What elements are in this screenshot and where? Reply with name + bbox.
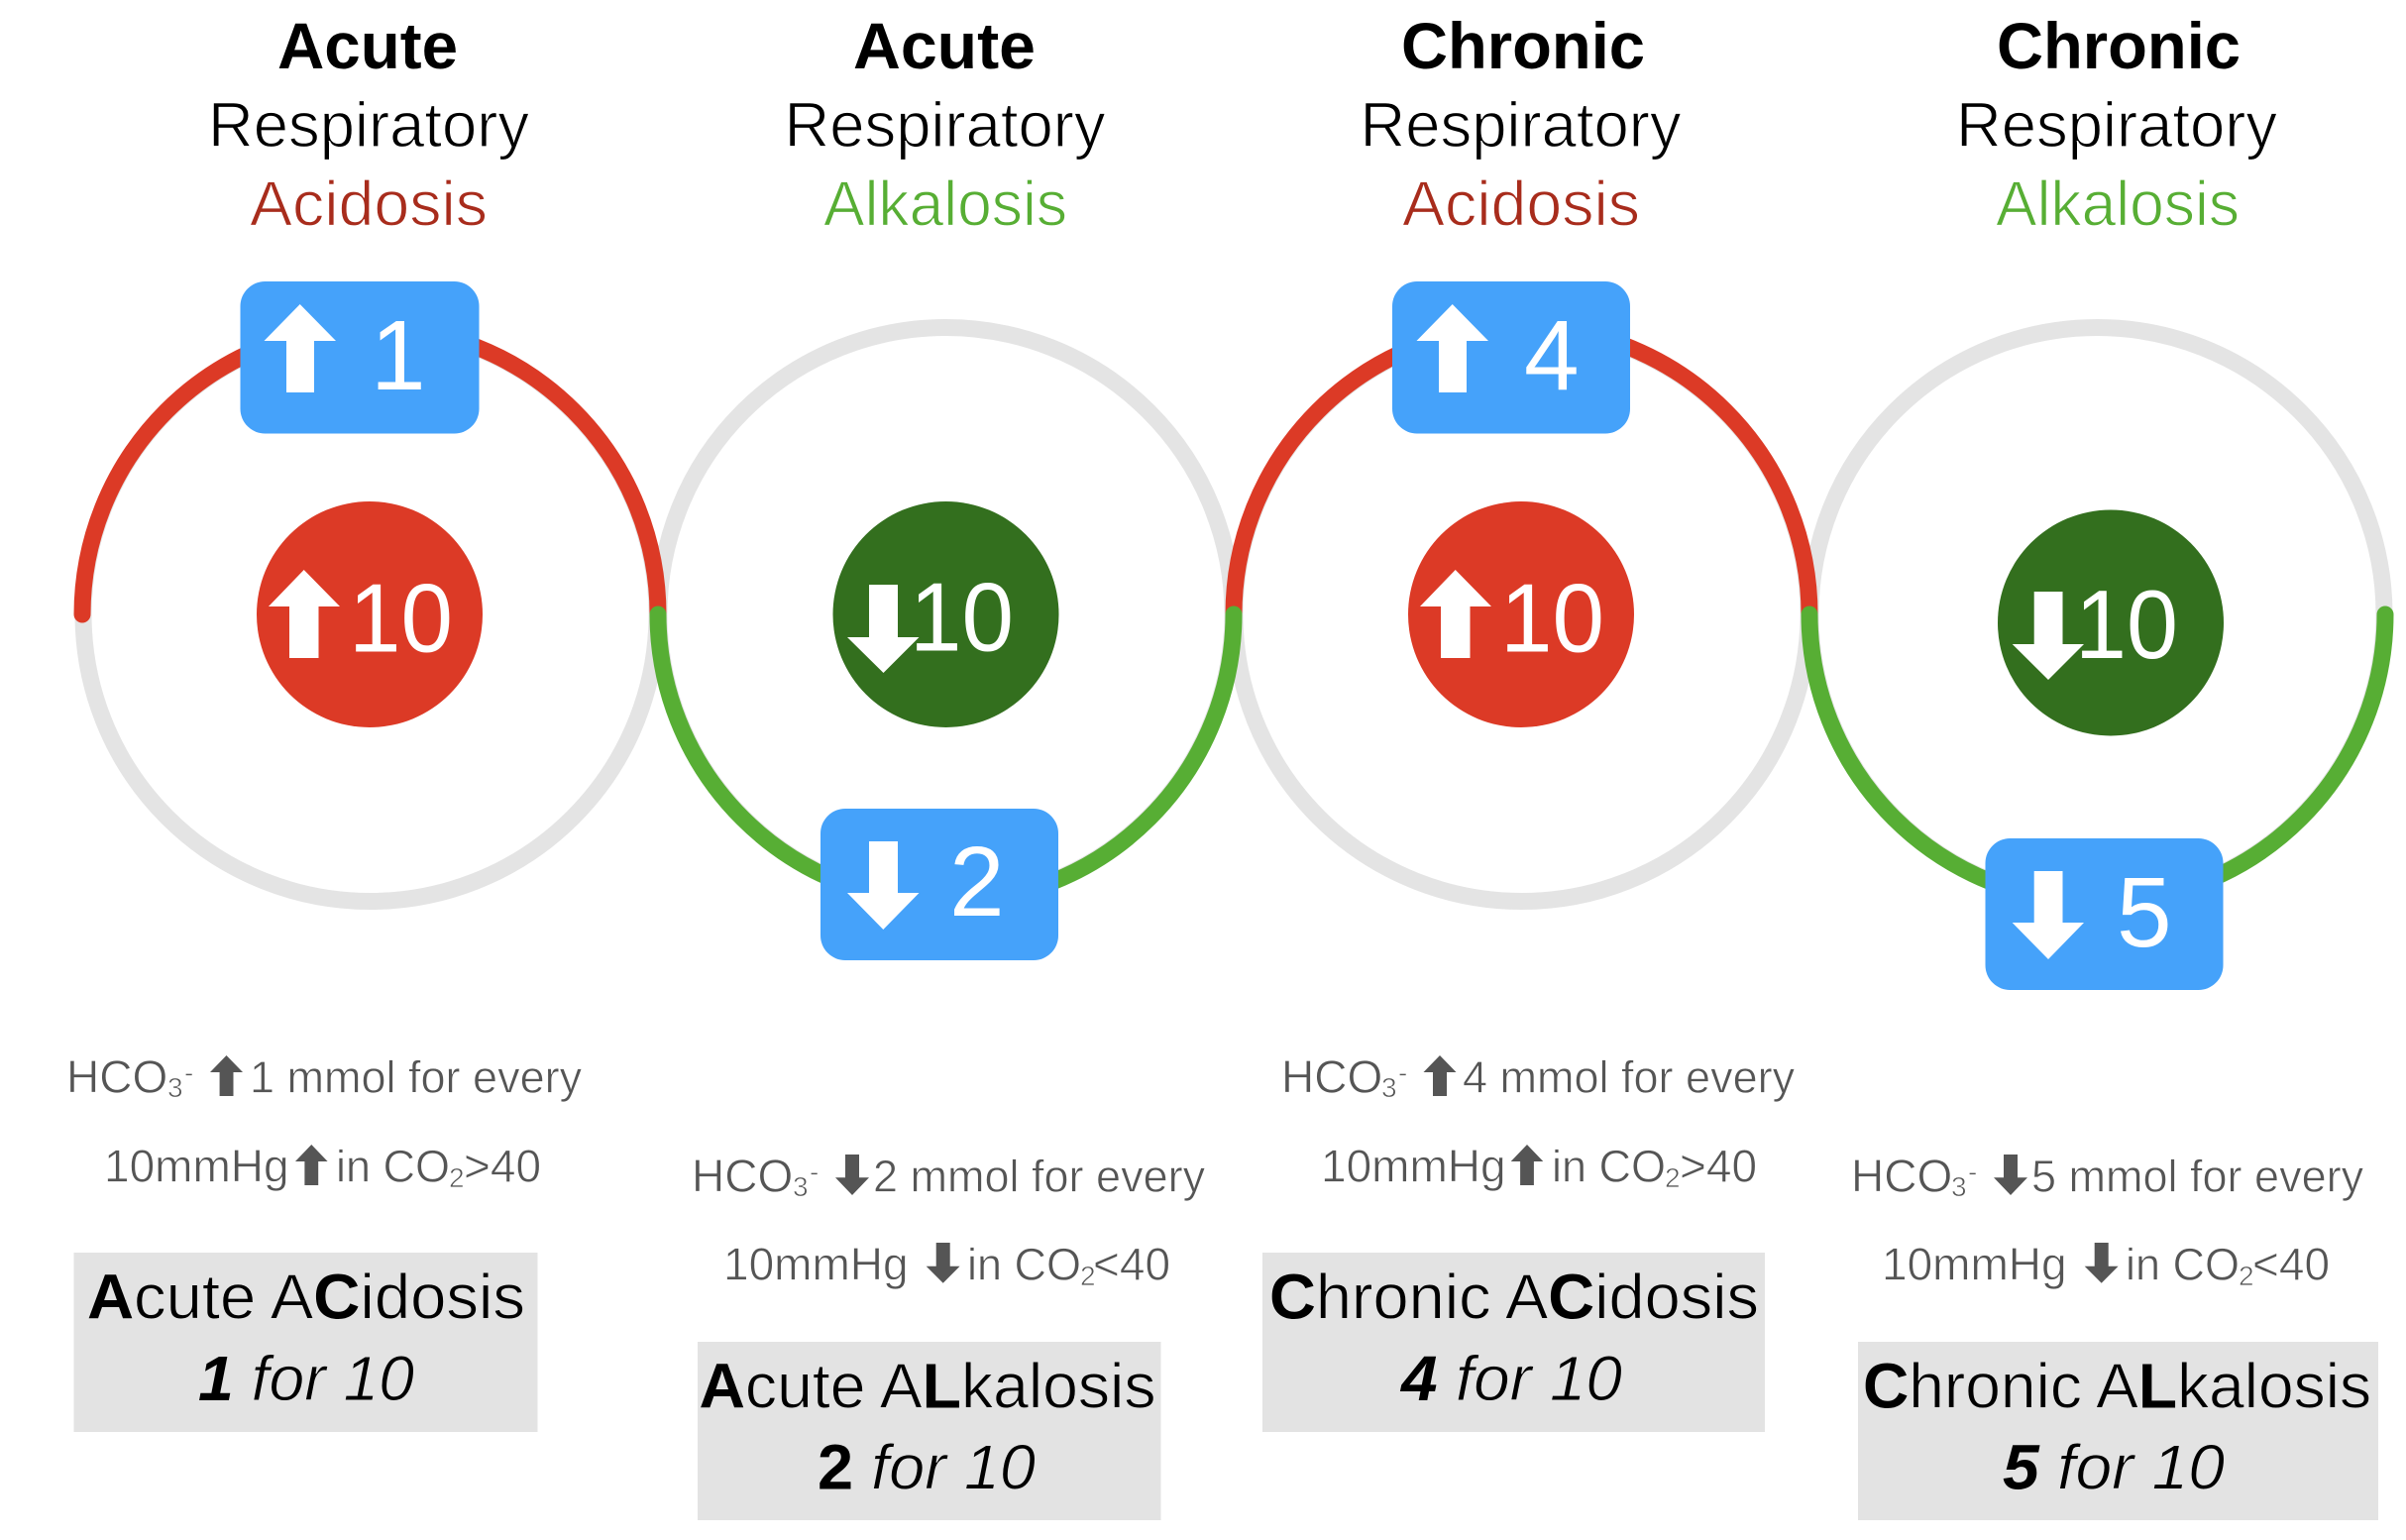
- badge: up 4: 4: [1524, 300, 1580, 411]
- rule text: HCO3 1 mmol: 3: [167, 1072, 183, 1103]
- green alkalosis arcs: [658, 614, 2385, 902]
- rule text: HCO3 5 mmol: HCO: [1851, 1150, 1952, 1201]
- rule text: HCO3 1 mmol: 1 mmol for every: [250, 1052, 583, 1102]
- circle: down 10: [1998, 509, 2224, 735]
- mnemonic box: chronic acidosis 4 for 10: [1262, 1253, 1765, 1432]
- rule text: HCO3 1 mmol: [66, 1050, 583, 1193]
- mnemonic box: acute alkalosis 2 for 10: 2 for 10: [818, 1431, 1036, 1502]
- rule text: HCO3 5 mmol: [1851, 1150, 2364, 1291]
- heading: acute respiratory alkalosis: Alkalosis: [823, 168, 1067, 240]
- circle: up 10: 10: [1500, 563, 1604, 672]
- circle: up 10: 10: [349, 563, 453, 672]
- rule text: HCO3 2 mmol: <40: [1093, 1239, 1170, 1290]
- rule text: HCO3 4 mmol: in CO: [1552, 1142, 1666, 1191]
- rule text: HCO3 5 mmol: 10mmHg: [1882, 1239, 2067, 1290]
- rule text: HCO3 1 mmol: 2: [449, 1162, 465, 1193]
- rule text: HCO3 2 mmol: [692, 1150, 1206, 1291]
- mnemonic box: acute alkalosis 2 for 10: Acute ALkalosis: [700, 1350, 1155, 1421]
- badge: down 5: 5: [2117, 857, 2172, 968]
- rule text: HCO3 5 mmol: 3: [1951, 1171, 1967, 1202]
- rule text: HCO3 4 mmol: >40: [1680, 1140, 1757, 1191]
- heading: acute respiratory alkalosis: Acute: [853, 9, 1036, 82]
- rule text: HCO3 1 mmol: HCO: [66, 1050, 167, 1102]
- badge: down 2: 2: [949, 826, 1005, 937]
- heading: acute respiratory alkalosis: [785, 9, 1106, 240]
- grey base rings: [83, 327, 2384, 902]
- rule text: HCO3 5 mmol: in CO: [2126, 1239, 2240, 1290]
- rule text: HCO3 2 mmol: 3: [793, 1171, 809, 1202]
- heading: acute respiratory acidosis: Acidosis: [250, 168, 488, 240]
- rule text: HCO3 2 mmol: 10mmHg: [723, 1239, 909, 1290]
- rule text: HCO3 4 mmol: HCO: [1281, 1050, 1382, 1102]
- mnemonic box: chronic alkalosis 5 for 10: [1858, 1342, 2378, 1520]
- rule text: HCO3 2 mmol: HCO: [692, 1150, 793, 1201]
- badge: down 2: [820, 809, 1058, 960]
- rule text: HCO3 4 mmol: 3: [1381, 1072, 1397, 1103]
- panel: acute respiratory acidosis: [66, 9, 583, 1432]
- heading: chronic respiratory acidosis: [1360, 9, 1681, 240]
- panel: chronic respiratory alkalosis: [1851, 9, 2378, 1520]
- mnemonic box: acute acidosis 1 for 10: Acute ACidosis: [87, 1261, 525, 1332]
- panel: chronic respiratory acidosis: [1262, 9, 1796, 1432]
- mnemonic box: chronic alkalosis 5 for 10: 5 for 10: [2003, 1431, 2225, 1502]
- badge: up 4: [1392, 281, 1630, 434]
- rule text: HCO3 4 mmol: 10mmHg: [1321, 1140, 1506, 1191]
- rule text: HCO3 2 mmol: in CO: [967, 1239, 1081, 1290]
- heading: chronic respiratory alkalosis: Respiratory: [1956, 89, 2277, 161]
- heading: chronic respiratory acidosis: Respiratory: [1360, 89, 1681, 161]
- heading: acute respiratory alkalosis: Respiratory: [785, 89, 1106, 161]
- rule text: HCO3 2 mmol: -: [810, 1156, 819, 1187]
- heading: acute respiratory acidosis: Respiratory: [208, 89, 529, 161]
- circle: down 10: 10: [910, 563, 1014, 672]
- badge: up 1: 1: [371, 300, 426, 411]
- rule text: HCO3 4 mmol: [1281, 1050, 1796, 1193]
- rule text: HCO3 5 mmol: 2: [2239, 1261, 2254, 1291]
- heading: chronic respiratory alkalosis: [1956, 9, 2277, 240]
- rule text: HCO3 5 mmol: 5 mmol for every: [2031, 1152, 2364, 1201]
- mnemonic box: chronic alkalosis 5 for 10: Chronic ALkalosis: [1863, 1350, 2371, 1421]
- badge: down 5: [1986, 838, 2224, 990]
- heading: chronic respiratory acidosis: Chronic: [1401, 9, 1645, 82]
- rule text: HCO3 4 mmol: 2: [1665, 1162, 1681, 1193]
- rule text: HCO3 2 mmol: 2 mmol for every: [873, 1152, 1206, 1201]
- circle: up 10: [1408, 501, 1634, 727]
- rule text: HCO3 1 mmol: 10mmHg: [104, 1140, 289, 1191]
- rule text: HCO3 4 mmol: 4 mmol for every: [1463, 1052, 1796, 1102]
- rule text: HCO3 1 mmol: >40: [464, 1140, 541, 1191]
- rule text: HCO3 2 mmol: 2: [1080, 1261, 1096, 1291]
- mnemonic box: chronic acidosis 4 for 10: Chronic ACidosis: [1269, 1261, 1759, 1332]
- circle: down 10: [832, 501, 1058, 727]
- circle: down 10: 10: [2075, 570, 2178, 679]
- mnemonic box: acute alkalosis 2 for 10: [698, 1342, 1161, 1520]
- mnemonic box: acute acidosis 1 for 10: 1 for 10: [198, 1343, 414, 1414]
- panel: acute respiratory alkalosis: [692, 9, 1206, 1520]
- red acidosis arcs: [82, 327, 1809, 614]
- heading: chronic respiratory alkalosis: Alkalosis: [1996, 168, 2240, 240]
- heading: acute respiratory acidosis: [208, 9, 529, 240]
- mnemonic box: chronic acidosis 4 for 10: 4 for 10: [1399, 1343, 1622, 1414]
- heading: chronic respiratory acidosis: Acidosis: [1402, 168, 1640, 240]
- rule text: HCO3 5 mmol: <40: [2252, 1239, 2330, 1290]
- circle: up 10: [257, 501, 483, 727]
- rule text: HCO3 4 mmol: -: [1398, 1057, 1407, 1088]
- rule text: HCO3 1 mmol: in CO: [336, 1142, 450, 1191]
- heading: acute respiratory acidosis: Acute: [277, 9, 458, 82]
- badge: up 1: [240, 281, 480, 434]
- mnemonic box: acute acidosis 1 for 10: [73, 1253, 537, 1432]
- heading: chronic respiratory alkalosis: Chronic: [1997, 9, 2241, 82]
- rule text: HCO3 5 mmol: -: [1968, 1156, 1977, 1187]
- rule text: HCO3 1 mmol: -: [184, 1057, 193, 1088]
